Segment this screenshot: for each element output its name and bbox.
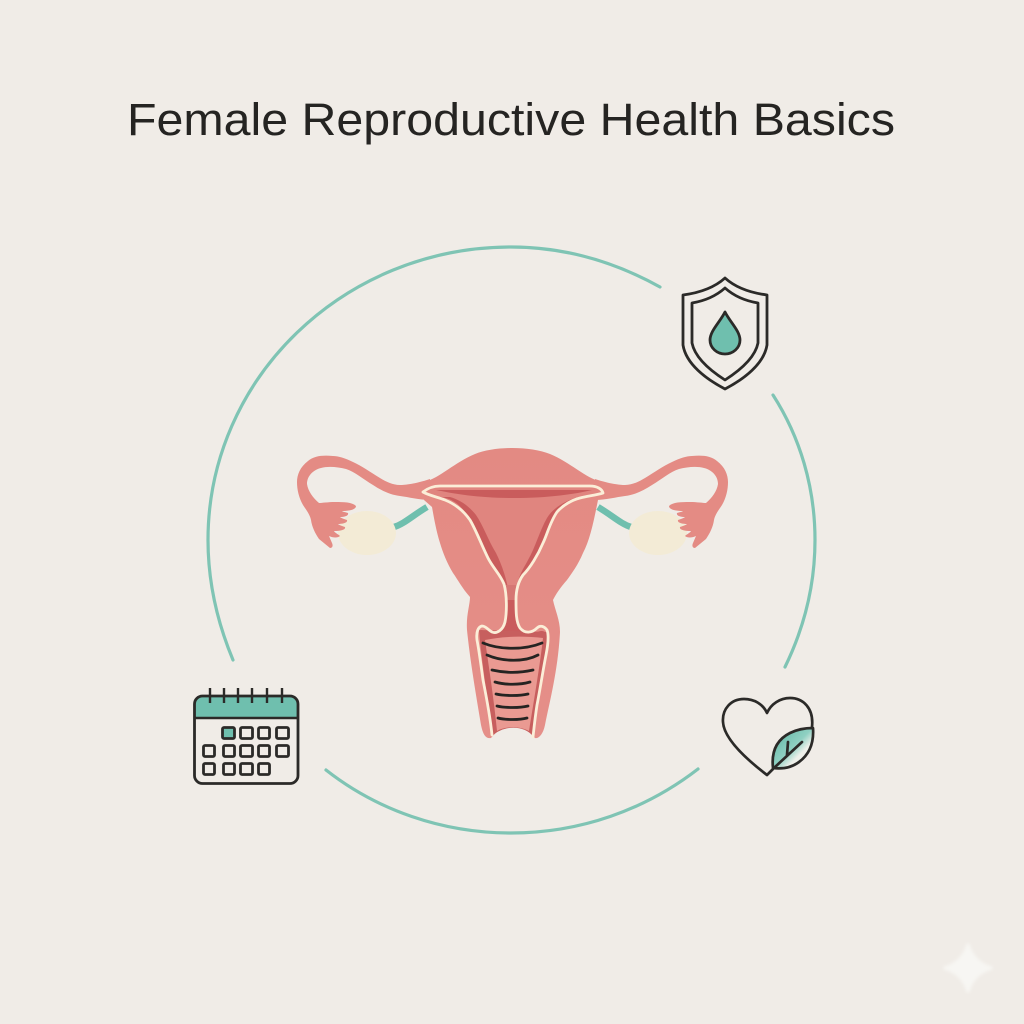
rugae lines (483, 643, 542, 720)
drop (710, 312, 740, 354)
icon: calendar (194, 688, 298, 784)
inner cavity (423, 486, 603, 600)
icon: shield with drop (683, 278, 767, 389)
uterus body (424, 448, 602, 738)
uterus illustration (297, 448, 728, 738)
left fallopian tube and ovary (297, 456, 430, 555)
cycle ring arcs (208, 247, 815, 833)
watermark sparkle (944, 944, 992, 992)
title: Female Reproductive Health Basics (127, 94, 895, 145)
right fallopian tube and ovary (595, 456, 728, 555)
leaf (773, 728, 813, 768)
dark inner bands (436, 490, 592, 645)
icon: heart with leaf (723, 698, 813, 775)
vaginal canal (479, 630, 547, 736)
cream outline (423, 486, 603, 737)
